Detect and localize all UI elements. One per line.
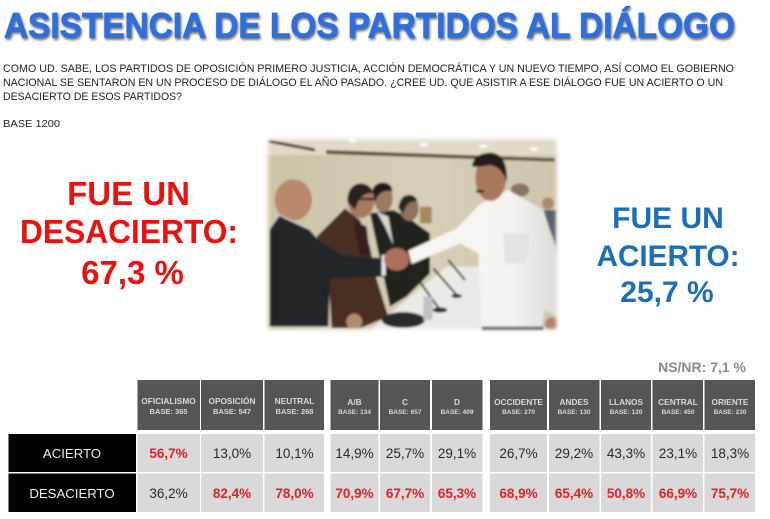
header labels: BASE: 450 — [662, 409, 695, 416]
row labels: DESACIERTO — [29, 486, 115, 501]
table — [370, 267, 483, 333]
header labels: BASE: 270 — [502, 409, 535, 416]
header labels: A/B — [347, 397, 362, 407]
acierto values: 10,1% — [275, 446, 314, 461]
header labels: NEUTRAL — [275, 396, 314, 406]
NS/NR note: NS/NR: 7,1 % — [658, 359, 747, 375]
desacierto values: 36,2% — [149, 486, 188, 501]
header labels: BASE: 657 — [389, 409, 422, 416]
photo: handshake at dialogue table — [265, 137, 560, 332]
question text: COMO UD. SABE, LOS PARTIDOS DE OPOSICIÓN PRIMERO JUSTICIA, ACCIÓN DEMOCRÁTICA Y UN NUEVO TIEMPO, ASÍ COMO EL GOBIERNO — [3, 62, 734, 75]
base note: BASE 1200 — [3, 118, 60, 130]
desacierto values: 66,9% — [659, 486, 697, 501]
desacierto values: 75,7% — [711, 486, 749, 501]
question text — [3, 62, 734, 103]
title: ASISTENCIA DE LOS PARTIDOS AL DIÁLOGO — [5, 8, 736, 48]
header labels: LLANOS — [609, 397, 644, 407]
desacierto values — [149, 486, 749, 501]
man in dark suit — [269, 215, 385, 327]
callout: desacierto: FUE UN — [67, 175, 190, 212]
acierto values: 14,9% — [335, 446, 374, 461]
row labels — [8, 434, 136, 512]
desacierto values: 50,8% — [607, 486, 645, 501]
acierto values: 25,7% — [386, 446, 424, 461]
header labels: BASE: 120 — [610, 409, 643, 416]
callout: desacierto: DESACIERTO: — [20, 213, 238, 250]
acierto values: 26,7% — [499, 446, 538, 461]
value cells — [138, 434, 755, 512]
callout: acierto: 25,7 % — [620, 276, 714, 309]
callout: acierto: ACIERTO: — [596, 240, 740, 273]
row labels: ACIERTO — [43, 446, 101, 461]
header labels: BASE: 268 — [276, 407, 313, 416]
acierto values: 43,3% — [607, 446, 645, 461]
acierto values: 29,1% — [438, 446, 476, 461]
background men — [370, 210, 430, 307]
microphones and glasses on table — [415, 260, 465, 310]
header labels: BASE: 547 — [213, 407, 251, 416]
acierto values: 18,3% — [711, 446, 749, 461]
callout: acierto: FUE UN — [612, 202, 724, 235]
header labels: BASE: 409 — [441, 409, 474, 416]
desacierto values: 70,9% — [335, 486, 374, 501]
acierto values: 56,7% — [149, 446, 188, 461]
acierto values: 23,1% — [659, 446, 697, 461]
callout: acierto — [596, 202, 740, 309]
header labels: C — [402, 397, 408, 407]
callout: desacierto — [20, 175, 238, 291]
acierto values — [149, 446, 749, 461]
callout: desacierto: 67,3 % — [81, 254, 184, 291]
header labels: BASE: 134 — [338, 409, 371, 416]
desacierto values: 78,0% — [275, 486, 314, 501]
header cells — [138, 380, 755, 430]
header labels: CENTRAL — [658, 397, 698, 407]
header labels: D — [454, 397, 460, 407]
desacierto values: 68,9% — [499, 486, 538, 501]
desacierto values: 82,4% — [213, 486, 251, 501]
man in white shirt — [408, 190, 558, 328]
desacierto values: 65,3% — [438, 486, 476, 501]
desacierto values: 67,7% — [386, 486, 424, 501]
header labels: OFICIALISMO — [141, 396, 196, 406]
question text: NACIONAL SE SENTARON EN UN PROCESO DE DIÁLOGO EL AÑO PASADO. ¿CREE UD. QUE ASISTIR A ESE DIÁLOGO FUE UN ACIERTO O UN — [3, 76, 723, 89]
wall and ceiling — [265, 154, 560, 332]
title: ASISTENCIA DE LOS PARTIDOS AL DIÁLOGO — [4, 6, 735, 46]
table: results by segment — [8, 380, 755, 512]
acierto values: 29,2% — [555, 446, 593, 461]
hands — [384, 248, 409, 271]
acierto values: 13,0% — [213, 446, 251, 461]
desacierto values: 65,4% — [555, 486, 593, 501]
header labels: OPOSICIÓN — [208, 395, 256, 406]
man in brown jacket — [317, 208, 388, 328]
question text: DESACIERTO DE ESOS PARTIDOS? — [3, 91, 182, 103]
header labels: BASE: 230 — [714, 409, 747, 416]
header labels: ANDES — [559, 397, 589, 407]
header labels — [141, 395, 749, 416]
header labels: OCCIDENTE — [494, 397, 543, 407]
header labels: BASE: 365 — [150, 407, 187, 416]
header labels: ORIENTE — [712, 397, 749, 407]
header labels: BASE: 130 — [558, 409, 591, 416]
